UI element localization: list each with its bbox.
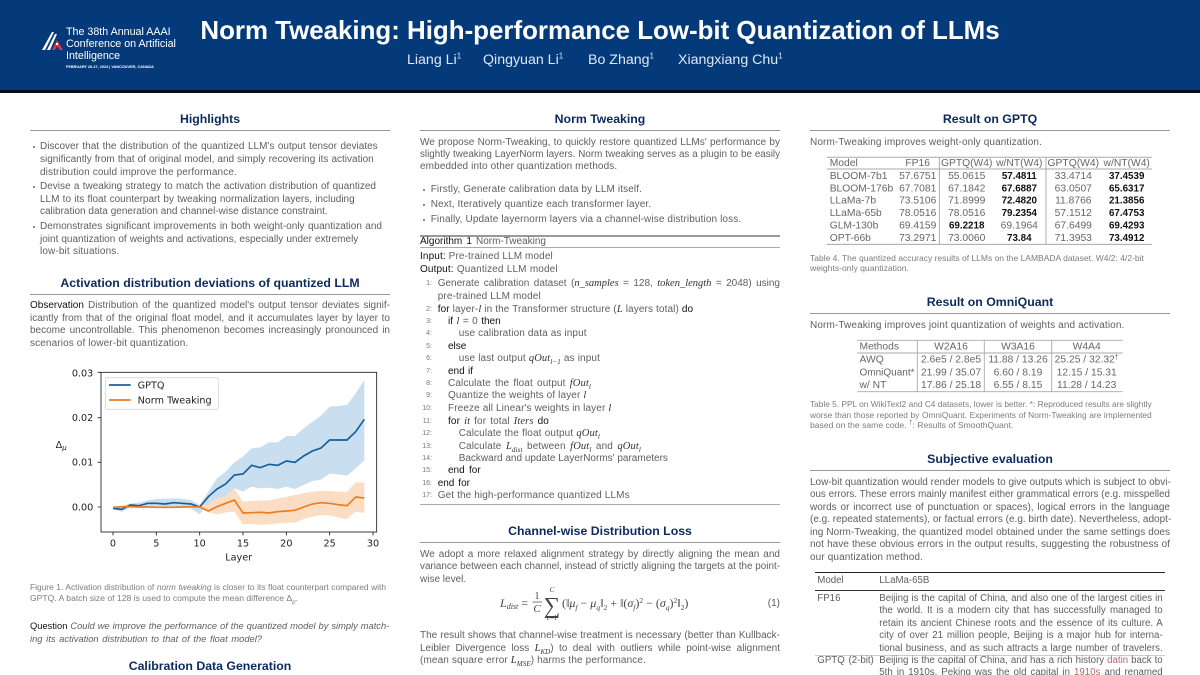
table: OmniQuant results: w/ NT [858, 380, 887, 391]
table: GPTQ results: 67.6887 [1002, 183, 1038, 194]
text: OmniQuant intro: Norm-Tweaking improves joint quantization of weights and activation. [810, 320, 1124, 331]
text block: result: The result shows that channel-wise treatment is necessary (better than Kullback- [420, 630, 780, 641]
equation: L_dist: f [575, 603, 578, 612]
text block: highlights bullets: Demonstrates significant improvements in both weight-only quantization and [40, 221, 382, 232]
algorithm steps: 9: [426, 392, 432, 399]
text block: subjective evaluation: not have these obvious errors in the output results, suggesting the robustness of [810, 539, 1170, 550]
algorithm steps: 11: [423, 418, 432, 425]
authors: Xiangxiang Chu1 [678, 51, 783, 68]
caption: table 5: Table 5. PPL on WikiText2 and C4 datasets, lower is better. *: Reproduced results are slightly [810, 399, 1152, 409]
algorithm steps: 8: [426, 380, 432, 387]
x axis ticks: 5 [153, 538, 159, 549]
text block: subjective evaluation: our quantization method. [810, 552, 923, 563]
text block: steps: Firstly, Generate calibration data by LLM itself. [431, 184, 642, 195]
algorithm steps: use calibration data as input [459, 328, 587, 339]
table: GPTQ results: 78.0516 [948, 208, 986, 219]
table: GPTQ results: 63.0507 [1055, 183, 1092, 194]
question: ing its activation distribution to that of the float model? [30, 634, 262, 644]
text block: alignment strategy: We adopt a more relaxed alignment strategy by directly aligning the mean and [420, 549, 780, 560]
heading: Result on OmniQuant: Result on OmniQuant [927, 295, 1053, 309]
algorithm steps: end for [438, 478, 470, 489]
row: FP16: the world. It is a modern city that has successfully managed to [879, 605, 1163, 616]
algorithm title: Algorithm 1 Norm-Tweaking [420, 236, 546, 246]
y axis ticks: 0.00 [72, 502, 93, 513]
legend [105, 378, 218, 409]
x axis ticks: 25 [324, 538, 336, 549]
table: GPTQ results: 78.0516 [899, 208, 937, 219]
x axis ticks: 30 [367, 538, 379, 549]
caption: table 4: weights-only quantization. [810, 263, 909, 273]
table: GPTQ results: 69.1964 [1001, 221, 1038, 232]
algorithm steps: Freeze all Linear's weights in layer l [448, 403, 611, 414]
heading: Activation distribution deviations: Activation distribution deviations of quantized LLM [60, 276, 360, 290]
equation: L_dist: μ [589, 596, 596, 610]
table: GPTQ results: BLOOM-176b [830, 183, 893, 194]
algorithm steps: end for [448, 465, 481, 476]
table: GPTQ results: 67.6499 [1055, 221, 1092, 232]
legend: GPTQ [138, 381, 165, 392]
question [30, 621, 389, 644]
text block: result: (mean square error LMSE) harms the performance. [420, 655, 646, 668]
text block: highlights bullets: low-bit situations. [40, 246, 119, 257]
table: OmniQuant results: W4A4 [1073, 342, 1101, 353]
text block: highlights bullets: significantly from that of original model, and simply recovering its activation [40, 154, 374, 165]
table: GPTQ results: FP16 [905, 158, 930, 169]
text block: subjective evaluation: ing Norm-Tweaking, the quantized model obtained under the same settings does [810, 527, 1170, 538]
table: GPTQ results: Model [830, 158, 858, 169]
algorithm steps: end if [448, 366, 473, 377]
table: GPTQ results: 73.5106 [899, 196, 937, 207]
text block: steps: Next, Iteratively quantize each transformer layer. [431, 199, 651, 210]
header banner [0, 0, 1200, 92]
text block: highlights bullets: LLM to its float counterpart by tweaking normalization layers, including [40, 194, 355, 205]
algorithm steps: 10: [422, 405, 432, 412]
table: GPTQ results: 65.6317 [1109, 183, 1145, 194]
table: GPTQ results: GPTQ(W4) [941, 158, 992, 169]
table: OmniQuant results: W3A16 [1001, 342, 1035, 353]
algorithm steps: pre-trained LLM model [438, 291, 541, 302]
table: OmniQuant results: 21.99 / 35.07 [921, 368, 981, 379]
algorithm steps: 2: [426, 306, 432, 313]
table: GPTQ results: 73.2971 [899, 233, 937, 244]
figure caption [30, 582, 386, 606]
table: GPTQ results: 69.4293 [1109, 221, 1145, 232]
algorithm steps: 6: [426, 355, 432, 362]
caption: table 4 [810, 253, 1144, 273]
conference name: The 38th Annual AAAI [66, 26, 171, 38]
y axis ticks: 0.03 [72, 368, 93, 379]
table: OmniQuant results: † [1115, 355, 1119, 362]
table: OmniQuant results: 25.25 / 32.32 [1055, 355, 1115, 366]
table: GPTQ results: 72.4820 [1002, 196, 1038, 207]
x axis ticks: 0 [110, 538, 116, 549]
equation: L_dist: − [578, 596, 590, 610]
algorithm steps: use last output qOutl−1 as input [459, 353, 600, 366]
row: FP16: city of over 21 million people, Beijing is a major hub for interna- [879, 630, 1163, 641]
table: GPTQ results: 33.4714 [1055, 171, 1092, 182]
algorithm steps [420, 251, 780, 501]
algorithm steps: 16: [422, 480, 432, 487]
line: GPTQ [113, 419, 364, 509]
algorithm steps: 4: [426, 330, 432, 337]
heading: Norm Tweaking: Norm Tweaking [555, 112, 645, 126]
heading: Calibration Data Generation: Calibration Data Generation [129, 659, 291, 673]
text block: observation: become uncontrollable. This phenomenon becomes increasingly pronounced in [30, 325, 390, 336]
table: GPTQ results: w/NT(W4) [995, 158, 1042, 169]
heading: Subjective evaluation: Subjective evaluation [927, 452, 1053, 466]
table: OmniQuant results: 2.6e5 / 2.8e5 [921, 355, 981, 366]
table: OmniQuant results [857, 340, 1123, 392]
table: OmniQuant results: 12.15 / 15.31 [1057, 368, 1117, 379]
text block: subjective evaluation: Low-bit quantization would render models to give outputs which is subject to obvi- [810, 477, 1171, 488]
table: GPTQ results: LLaMa-7b [830, 196, 876, 207]
text block: highlights bullets: joint quantization of weights and activations, especially under extremely [40, 234, 358, 245]
equation: L_dist: (‖μ [562, 596, 575, 610]
y axis ticks: 0.02 [72, 413, 93, 424]
table: GPTQ results: 21.3856 [1109, 196, 1145, 207]
table: GPTQ results: 55.0615 [948, 171, 986, 182]
table: OmniQuant results: OmniQuant* [860, 368, 915, 379]
x axis ticks: 20 [280, 538, 292, 549]
x axis label: Layer [225, 552, 252, 563]
table: GPTQ results: OPT-66b [830, 233, 871, 244]
text block: highlights bullets: Discover that the distribution of the quantized LLM's output tensor deviates [40, 141, 378, 152]
algorithm steps: 12: [422, 430, 432, 437]
conference name [66, 26, 176, 69]
table: GPTQ results: 11.8766 [1055, 196, 1092, 207]
text block: observation: icantly from that of the original float model, and it accumulates layer by layer to [30, 313, 390, 324]
table: OmniQuant results: AWQ [860, 355, 884, 366]
conference name: Intelligence [66, 50, 120, 62]
caption: table 5 [810, 399, 1152, 430]
figure caption: GPTQ. A batch size of 128 is used to compute the mean difference Δμ. [30, 593, 298, 606]
equation: L_dist: − ( [643, 596, 660, 610]
text block: steps: Finally, Update layernorm layers via a channel-wise distribution loss. [431, 214, 741, 225]
text block: subjective evaluation: words or incorrect use of punctuation or spaces), logical errors in the language [810, 502, 1170, 513]
text: GPTQ intro: Norm-Tweaking improves weight-only quantization. [810, 137, 1042, 148]
algorithm steps: Output: Quantized LLM model [420, 264, 558, 275]
y axis label: μ [61, 444, 67, 452]
algorithm steps: 1: [426, 280, 432, 287]
line chart: layer deviation [56, 368, 379, 563]
row: FP16 [817, 593, 1163, 654]
heading: Channel-wise Distribution Loss: Channel-wise Distribution Loss [508, 524, 692, 538]
table: sample outputs [815, 572, 1165, 675]
table: GPTQ results: 57.4811 [1002, 171, 1037, 182]
authors: Qingyuan Li1 [483, 51, 563, 68]
table: GPTQ results: 73.4912 [1109, 233, 1145, 244]
text block: highlights bullets: Devise a tweaking strategy to match the activation distribution of quantized [40, 181, 376, 192]
text block: subjective evaluation: (e.g. repeated statements), or factual errors (e.g. birth date). Nevertheless, adopt- [810, 514, 1171, 525]
equation: L_dist: ) [635, 596, 639, 610]
table: OmniQuant results: 6.55 / 8.15 [994, 380, 1043, 391]
algorithm steps: if l = 0 then [448, 316, 501, 327]
algorithm steps: Calculate the float output qOutl [459, 428, 600, 441]
row: FP16: tional business, and as such attracts a large number of travelers. [879, 643, 1163, 654]
algorithm steps: 3: [426, 318, 432, 325]
legend: Norm Tweaking [138, 396, 212, 407]
equation: L_dist: q [596, 603, 600, 612]
caption: table 5: based on the same code. †: Results of SmoothQuant. [810, 419, 1013, 430]
table: GPTQ results: 67.4753 [1109, 208, 1145, 219]
text block: observation [30, 300, 390, 348]
row: FP16: retain its ancient Chinese roots and the essence of its culture. A [879, 618, 1163, 629]
band: Norm Tweaking spread [113, 482, 364, 525]
equation: L_dist: 2 [674, 596, 678, 605]
title: Norm Tweaking: High-performance Low-bit Quantization of LLMs [200, 17, 1000, 45]
equation: L_dist: ∑ [544, 593, 560, 618]
equation: L_dist: (1) [768, 598, 780, 609]
text block: result: Leibler Divergence loss LKD) to deal with outliers while point-wise alignment [420, 643, 780, 656]
text block: highlights bullets: calibration data generation and channel-wise distance constraint. [40, 206, 328, 217]
algorithm steps: 15: [422, 467, 432, 474]
equation: L_dist: f [633, 603, 636, 612]
algorithm steps: for layer-l in the Transformer structure (L layers total) do [438, 304, 693, 315]
question: Question Could we improve the performance of the quantized model by simply match- [30, 621, 389, 631]
text block: result [420, 630, 780, 668]
equation: L_dist: C [533, 603, 541, 615]
table: GPTQ results: 57.1512 [1055, 208, 1092, 219]
algorithm steps: Input: Pre-trained LLM model [420, 251, 553, 262]
text block: highlights bullets: distribution could improve the performance. [40, 166, 237, 178]
table: GPTQ results: 37.4539 [1109, 171, 1145, 182]
table: OmniQuant results: Methods [860, 342, 899, 353]
equation: L_dist: 2 [603, 603, 607, 612]
algorithm steps: 13: [422, 443, 432, 450]
algorithm steps: else [448, 341, 466, 352]
algorithm steps: Calculate the float output fOutl [448, 378, 591, 391]
conference name: FEBRUARY 20-27, 2024 | VANCOUVER, CANADA [66, 65, 154, 69]
y axis ticks: 0.01 [72, 458, 93, 469]
text block: alignment strategy [420, 549, 780, 585]
table: GPTQ results: 69.2218 [949, 221, 985, 232]
row: FP16: Beijing is the capital of China, and also one of the largest cities in [879, 593, 1163, 604]
table: OmniQuant results: W2A16 [934, 342, 968, 353]
equation: L_dist: ) [684, 596, 688, 610]
table: GPTQ results: GLM-130b [830, 221, 879, 232]
caption: table 5: worse than those reported by OmniQuant. Experiments of Norm-Tweaking are implemented [810, 410, 1152, 420]
icon: AAAI logo [42, 32, 63, 50]
text block: proposal: embedded into other quantization methods. [420, 161, 617, 172]
table: GPTQ results: w/NT(W4) [1103, 158, 1150, 169]
authors: Bo Zhang1 [588, 51, 654, 68]
algorithm steps: for it for total Iters do [448, 416, 549, 427]
text block: observation: scenarios of lower-bit quantization. [30, 338, 188, 348]
heading: Highlights: Highlights [180, 112, 240, 126]
text block: highlights bullets [33, 141, 382, 257]
table: GPTQ results: 71.3953 [1055, 233, 1092, 244]
row: FP16: FP16 [817, 593, 840, 604]
row: GPTQ 2-bit: GPTQ (2-bit) [817, 655, 874, 666]
table: GPTQ results [826, 156, 1152, 245]
algorithm steps: 17: [422, 492, 432, 499]
algorithm steps: Calculate Ldist between fOutl and qOutl [459, 441, 641, 454]
equation: L_dist: 2 [639, 596, 643, 605]
table: OmniQuant results: 11.28 / 14.23 [1057, 380, 1117, 391]
line: Norm Tweaking [113, 497, 364, 513]
text block: subjective evaluation [810, 477, 1171, 563]
table: GPTQ results: 79.2354 [1002, 208, 1038, 219]
authors: Liang Li1 [407, 51, 461, 68]
table: OmniQuant results: 17.86 / 25.18 [921, 380, 981, 391]
table: GPTQ results: BLOOM-7b1 [830, 171, 888, 182]
algorithm steps: 7: [426, 368, 432, 375]
text block: steps [423, 184, 741, 225]
authors [407, 51, 783, 68]
table: sample outputs: LLaMa-65B [879, 575, 929, 586]
equation: L_dist: σ [627, 596, 634, 610]
table: GPTQ results: 57.6751 [899, 171, 937, 182]
table: GPTQ results: 73.0060 [948, 233, 986, 244]
y axis ticks [72, 368, 101, 513]
algorithm steps: 14: [422, 455, 432, 462]
table: GPTQ results: GPTQ(W4) [1048, 158, 1099, 169]
equation: L_dist: σ [660, 596, 667, 610]
text block: proposal [420, 137, 780, 172]
row: GPTQ 2-bit [817, 655, 1163, 675]
text block: proposal: We propose Norm-Tweaking, to quickly restore quantized LLMs' performance by [420, 137, 780, 148]
equation: L_dist: = [518, 596, 528, 610]
algorithm steps: Backward and update LayerNorms' parameters [459, 453, 668, 464]
equation: L_dist: 1 [534, 591, 540, 602]
algorithm steps: Generate calibration dataset (n_samples = 128, token_length = 2048) using [438, 278, 780, 289]
table: OmniQuant results: 11.88 / 13.26 [988, 355, 1048, 366]
table: GPTQ results: 73.84 [1007, 233, 1032, 244]
equation: L_dist: C [549, 585, 555, 594]
algorithm steps: Get the high-performance quantized LLMs [438, 490, 630, 501]
text block: alignment strategy: variance between each channel, instead of strictly aligning the targets at the point- [420, 561, 780, 572]
table: GPTQ results: 67.1842 [948, 183, 986, 194]
band: GPTQ spread [113, 380, 364, 514]
equation: L_dist: ) [670, 596, 674, 610]
text block: alignment strategy: wise level. [420, 574, 466, 585]
table: OmniQuant results: 6.60 / 8.19 [994, 368, 1043, 379]
algorithm steps: Quantize the weights of layer l [448, 390, 586, 401]
equation: L_dist: dist [507, 602, 519, 611]
heading: Result on GPTQ: Result on GPTQ [943, 112, 1037, 126]
equation: L_dist: 2 [681, 603, 685, 612]
figure caption: Figure 1. Activation distribution of norm tweaking is closer to its float counterpart compared with [30, 582, 386, 592]
x axis ticks: 15 [237, 538, 249, 549]
algorithm steps: 5: [426, 343, 432, 350]
table: GPTQ results: 71.8999 [948, 196, 986, 207]
x axis ticks [110, 532, 379, 549]
table: sample outputs: Model [817, 575, 844, 586]
equation: L_dist: + ‖( [607, 596, 627, 610]
conference name: Conference on Artificial [66, 38, 176, 50]
equation: L_dist: ‖ [600, 596, 603, 610]
table: GPTQ results: LLaMa-65b [830, 208, 882, 219]
equation: L_dist: c=1 [547, 614, 558, 622]
caption: table 4: Table 4. The quantized accuracy results of LLMs on the LAMBADA dataset. W4/2: 4/2-bit [810, 253, 1144, 263]
text block: observation: Observation Distribution of the quantized model's output tensor deviates signif- [30, 300, 390, 311]
y axis label: Δ [56, 440, 62, 451]
table: GPTQ results: 67.7081 [899, 183, 937, 194]
equation: L_dist [500, 585, 780, 622]
table: GPTQ results: 69.4159 [899, 221, 937, 232]
text block: subjective evaluation: ous errors. These errors mainly manifest either grammatical errors (e.g. misspelled [810, 489, 1170, 500]
equation: L_dist: L [500, 596, 507, 610]
x axis ticks: 10 [194, 538, 206, 549]
equation: L_dist: q [666, 603, 670, 612]
equation: L_dist: ‖ [677, 596, 681, 610]
algorithm panel [420, 235, 780, 501]
text block: proposal: slightly tweaking LayerNorm layers. Norm tweaking serves as a plugin to be easily [420, 149, 780, 160]
row: GPTQ 2-bit: Beijing is the capital of China, and has a rich history datin back to [879, 655, 1163, 666]
